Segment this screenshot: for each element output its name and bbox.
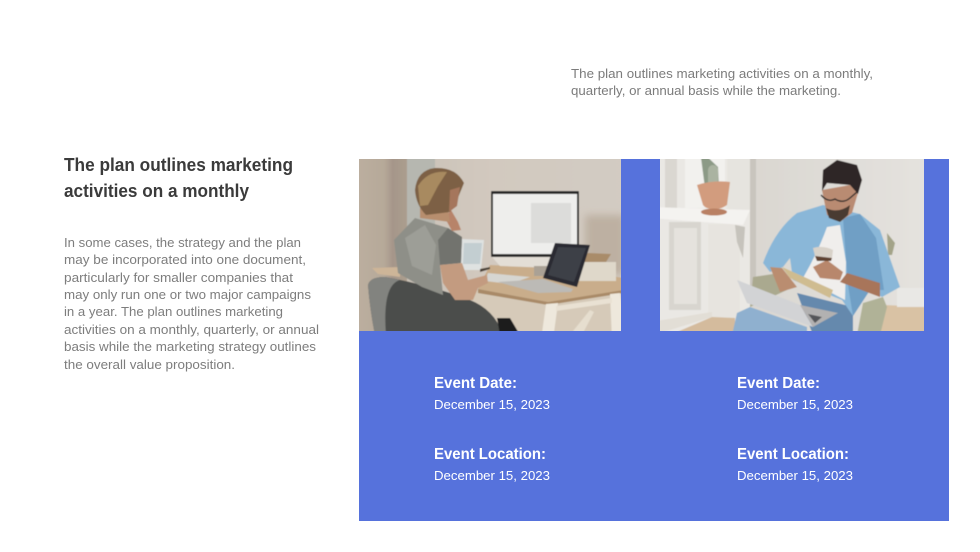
sill xyxy=(660,207,750,224)
arms and hands xyxy=(840,273,880,297)
text block: left body paragraph: In some cases, the strategy and the plan xyxy=(64,235,301,250)
panel: blue event panel xyxy=(359,159,949,521)
text block: left body paragraph: may only run one or two major campaigns xyxy=(64,287,311,302)
event info: left column: Event Location: xyxy=(434,446,546,463)
text block: left body paragraph: particularly for smaller companies that xyxy=(64,270,293,285)
event info: right column: December 15, 2023 xyxy=(737,468,853,483)
shirt xyxy=(394,218,448,296)
chair xyxy=(384,278,500,331)
text block: left body paragraph: may be incorporated into one document, xyxy=(64,252,306,267)
text block: top intro: The plan outlines marketing activities on a monthly, xyxy=(571,66,873,81)
event info: left column: December 15, 2023 xyxy=(434,468,550,483)
cup xyxy=(813,247,833,258)
jeans xyxy=(797,293,853,335)
photo: man reading with laptop xyxy=(660,159,924,331)
undershirt xyxy=(803,225,846,300)
text block: top intro: quarterly, or annual basis while the marketing. xyxy=(571,83,841,98)
text block: left body paragraph: basis while the marketing strategy outlines xyxy=(64,339,317,354)
text block: left body paragraph: activities on a monthly, quarterly, or annual xyxy=(64,322,319,337)
keyboard xyxy=(485,273,530,284)
text block: left body paragraph xyxy=(64,235,319,372)
small laptop behind xyxy=(460,239,484,270)
shirt xyxy=(763,205,900,316)
desk top xyxy=(478,265,630,302)
text block: left body paragraph: in a year. The plan outlines marketing xyxy=(64,304,283,319)
text block: top intro xyxy=(571,66,873,98)
laptop xyxy=(737,280,813,327)
photo: man working at desk xyxy=(359,159,621,331)
event info: right column: Event Location: xyxy=(737,446,849,463)
arm xyxy=(440,263,488,300)
desk legs xyxy=(542,302,558,331)
face xyxy=(822,185,858,222)
head xyxy=(415,168,464,215)
beard xyxy=(826,205,850,222)
raised hand xyxy=(445,210,461,231)
event info: right column: Event Date: xyxy=(737,375,820,392)
icon: terracotta pot xyxy=(697,181,730,209)
armchair xyxy=(750,274,787,307)
neck xyxy=(420,208,450,222)
event info: left column: December 15, 2023 xyxy=(434,397,550,412)
event info: left column: Event Date: xyxy=(434,375,517,392)
event info: right column xyxy=(737,375,853,483)
paper xyxy=(782,267,833,298)
window and wall panelling xyxy=(660,159,750,331)
text block: left body paragraph: the overall value proposition. xyxy=(64,357,235,372)
laptop xyxy=(543,243,590,287)
heading: left column xyxy=(64,155,293,201)
heading: left column: activities on a monthly xyxy=(64,181,249,201)
monitor xyxy=(491,191,579,257)
heading: left column: The plan outlines marketing xyxy=(64,155,293,175)
event info: left column xyxy=(434,375,550,483)
cactus xyxy=(700,159,720,184)
event info: right column: December 15, 2023 xyxy=(737,397,853,412)
hair xyxy=(822,160,862,194)
glasses xyxy=(821,192,857,201)
box on desk xyxy=(579,262,616,281)
desk left section xyxy=(372,267,400,277)
floor xyxy=(678,316,736,331)
